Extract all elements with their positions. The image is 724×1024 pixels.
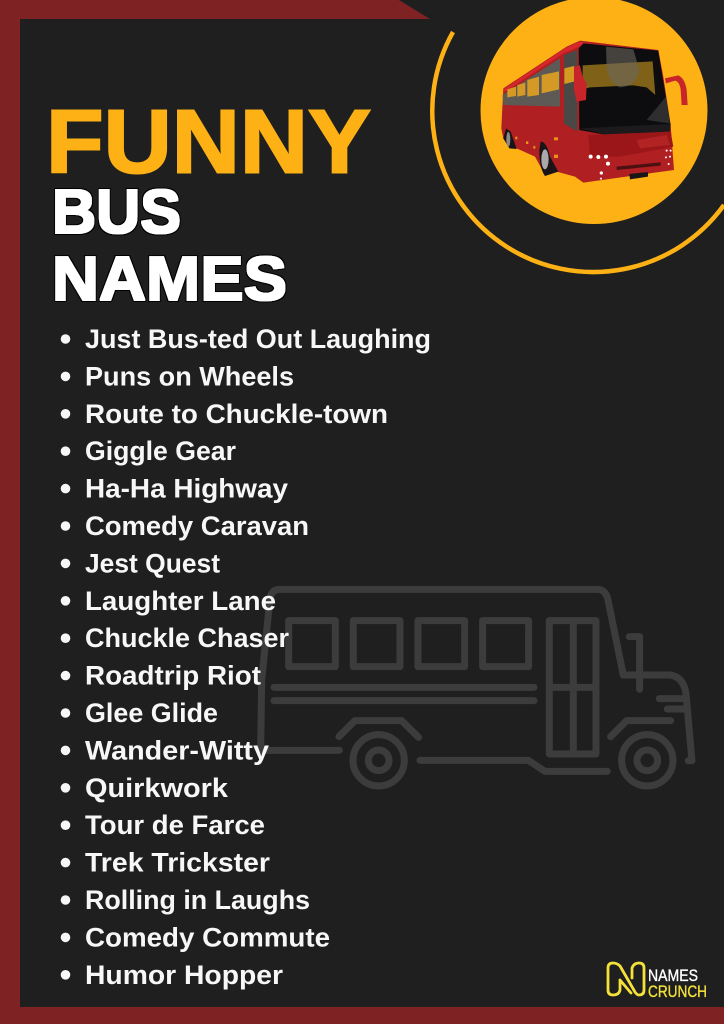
headlights <box>589 150 672 180</box>
list of funny bus names: Just Bus-ted Out Laughing <box>85 324 431 354</box>
logo mark <box>608 963 644 995</box>
list of funny bus names: Humor Hopper <box>85 960 284 990</box>
list of funny bus names: Wander-Witty <box>85 735 269 765</box>
list of funny bus names: Roadtrip Riot <box>85 661 261 691</box>
title: NAMES: NAMES <box>52 245 287 314</box>
list of funny bus names: Laughter Lane <box>85 586 276 616</box>
wheels <box>539 142 558 176</box>
red coach photo illustration <box>501 41 688 183</box>
list of funny bus names: Comedy Caravan <box>85 511 309 541</box>
list of funny bus names: Quirkwork <box>85 773 229 803</box>
list of funny bus names: Route to Chuckle-town <box>85 399 388 429</box>
list of funny bus names: Giggle Gear <box>85 436 236 466</box>
list of funny bus names: Rolling in Laughs <box>85 885 310 915</box>
logo text: CRUNCH: CRUNCH <box>648 983 707 1001</box>
list of funny bus names: Glee Glide <box>85 698 218 728</box>
left mirror <box>574 65 587 102</box>
list of funny bus names: Ha-Ha Highway <box>85 474 288 504</box>
watermark school bus icon <box>261 589 692 786</box>
yellow circle <box>480 0 708 224</box>
list of funny bus names: Tour de Farce <box>85 810 265 840</box>
list of funny bus names: Jest Quest <box>85 548 220 578</box>
logo text: NAMES: NAMES <box>648 967 698 985</box>
list of funny bus names: Trek Trickster <box>85 848 271 878</box>
Names Crunch logo <box>608 963 707 1001</box>
title: BUS: BUS <box>52 178 181 247</box>
list of funny bus names: Puns on Wheels <box>85 361 294 391</box>
list of funny bus names <box>61 324 431 990</box>
list of funny bus names: Comedy Commute <box>85 922 330 952</box>
list of funny bus names: Chuckle Chaser <box>85 623 289 653</box>
title: FUNNY: FUNNY <box>46 92 371 192</box>
yellow ring arc <box>432 32 724 272</box>
right mirror <box>665 75 688 105</box>
